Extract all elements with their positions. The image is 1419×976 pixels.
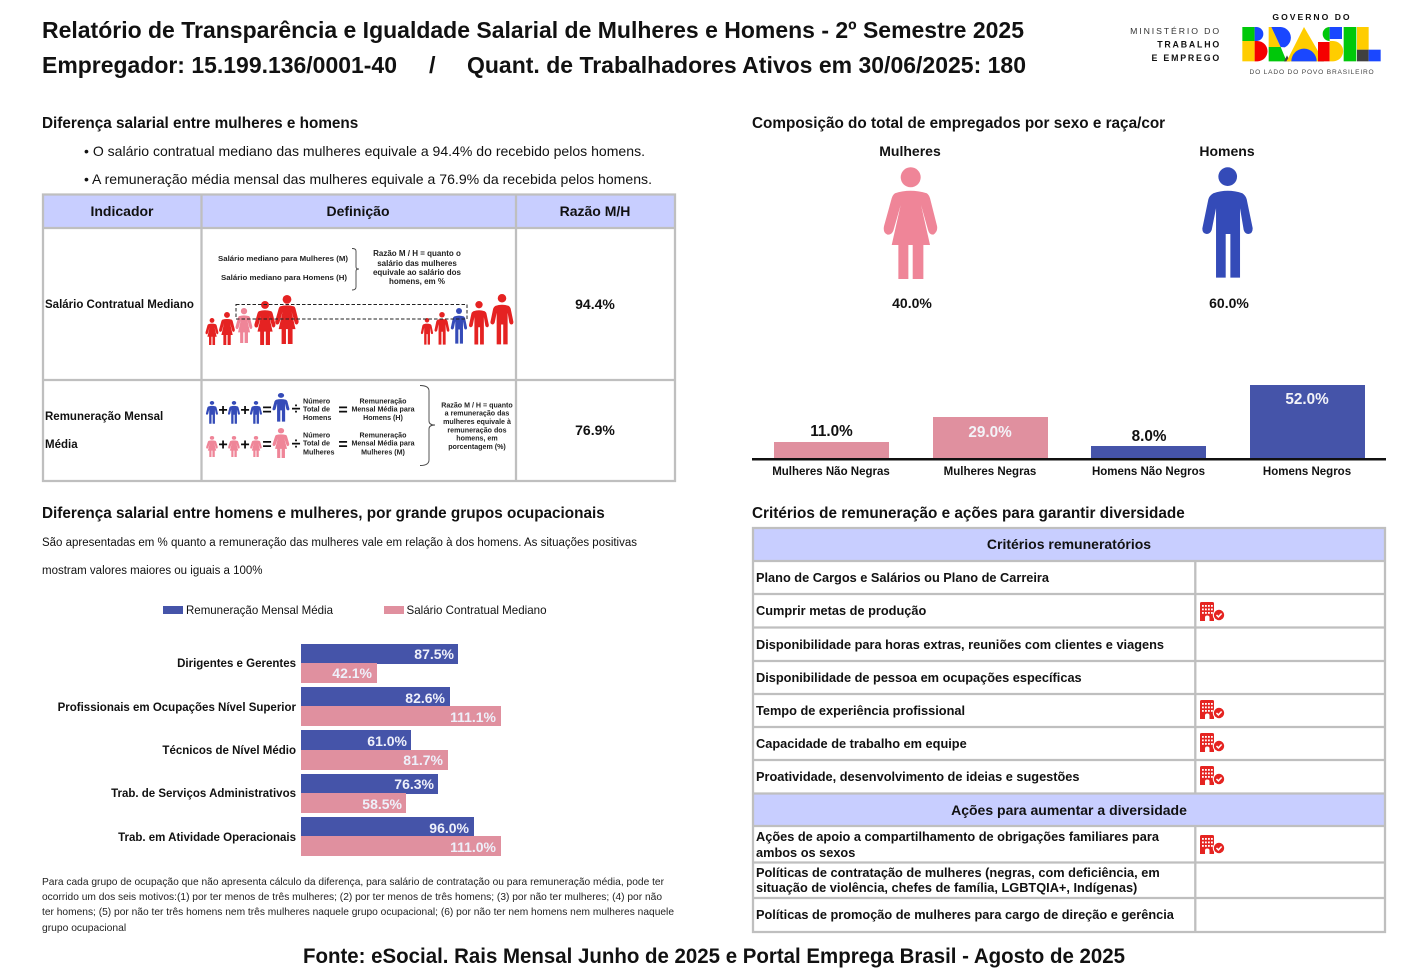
diagram: remuneração média: Homens (H) (363, 414, 404, 422)
legend: Remuneração Mensal Média (186, 603, 333, 617)
bars: trab. de serviços administrativos: 58.5% (362, 796, 403, 812)
diagram: remuneração média: Razão M / H = quanto (441, 402, 513, 410)
row: políticas de contratação: situação de violência, chefes de família, LGBTQIA+, Indígenas) (756, 880, 1137, 895)
logo: governo do brasil: GOVERNO DO (1272, 12, 1352, 22)
bars: técnicos de nível médio (162, 730, 448, 770)
column: mulheres negras (933, 417, 1048, 478)
text block: nota de rodapé: Para cada grupo de ocupação que não apresenta cálculo da diferença, para salário de contratação ou para remuneração média, pode ter (42, 877, 665, 888)
title (42, 17, 1026, 78)
bars: trab. de serviços administrativos: 76.3% (394, 776, 435, 792)
diagram: remuneração média: homens, em (456, 434, 498, 442)
row: remuneração mensal média: Média (45, 439, 78, 451)
panel: composição por sexo e raça/cor (752, 115, 1386, 478)
row: remuneração mensal média: 76.9% (575, 422, 615, 438)
diagram: remuneração média: + (218, 436, 228, 454)
diagram: remuneração média: Número (303, 430, 331, 440)
title: / (429, 52, 436, 78)
column: homens não negros: Homens Não Negros (1092, 466, 1205, 478)
bars: técnicos de nível médio: Técnicos de Nível Médio (162, 745, 296, 757)
row: proatividade: Proatividade, desenvolvimento de ideias e sugestões (756, 769, 1080, 784)
row: ações de apoio: ambos os sexos (756, 845, 855, 860)
text block: explicação: mostram valores maiores ou iguais a 100% (42, 565, 263, 577)
row: políticas de contratação (756, 865, 1160, 895)
pictogram: homens 60% (1199, 143, 1255, 311)
row: políticas de contratação: Políticas de contratação de mulheres (negras, com deficiência, em (756, 865, 1160, 880)
text block: explicação: São apresentadas em % quanto a remuneração das mulheres vale em relação à dos homens. As situações positivas (42, 537, 637, 549)
table header: Definição (326, 203, 390, 219)
column: mulheres não negras: 11.0% (810, 423, 853, 440)
header: critérios remuneratórios: Critérios remuneratórios (987, 536, 1151, 552)
row: capacidade de trabalho (756, 733, 1225, 752)
diagram: remuneração média: = (338, 436, 348, 454)
bars: técnicos de nível médio: 61.0% (367, 733, 408, 749)
diagram: remuneração média: a remuneração das (445, 410, 509, 418)
diagram: remuneração média: remuneração dos (447, 426, 507, 434)
diagram: salário mediano: salário das mulheres (377, 259, 457, 268)
diagram: remuneração média: ÷ (292, 401, 301, 418)
row: remuneração mensal média (45, 411, 615, 451)
diagram: remuneração média (206, 386, 513, 466)
bars: trab. de serviços administrativos (111, 774, 438, 813)
logo: ministério do trabalho e emprego: MINISTÉRIO DO (1130, 26, 1221, 36)
diagram: remuneração média: + (240, 436, 250, 454)
bars: trab. em atividade operacionais (118, 817, 501, 856)
diagram: salário mediano (205, 248, 513, 345)
bars: profissionais em ocupações nível superior: 111.1% (450, 709, 497, 725)
title: Empregador: 15.199.136/0001-40 (42, 52, 397, 78)
diagram: remuneração média: Remuneração (360, 432, 407, 440)
diagram: salário mediano: Salário mediano para Mulheres (M) (218, 254, 349, 263)
pictogram: homens 60%: 60.0% (1209, 295, 1249, 311)
diagram: salário mediano: homens, em % (389, 277, 445, 286)
diagram: remuneração média: mulheres equivale à (443, 418, 511, 426)
table header: Indicador (90, 203, 154, 219)
heading: critérios: Critérios de remuneração e ações para garantir diversidade (752, 505, 1185, 522)
diagram: remuneração média: Remuneração (360, 398, 407, 406)
row: remuneração mensal média: Remuneração Mensal (45, 411, 163, 423)
bars: dirigentes e gerentes: 42.1% (332, 665, 373, 681)
bars: dirigentes e gerentes: 87.5% (414, 646, 455, 662)
bars: técnicos de nível médio: 81.7% (403, 752, 444, 768)
row: plano de cargos: Plano de Cargos e Salários ou Plano de Carreira (756, 570, 1050, 585)
table header (90, 203, 630, 219)
diagram: remuneração média: Mensal Média para (351, 406, 415, 414)
pictogram: mulheres 40% (879, 143, 941, 311)
legend: Salário Contratual Mediano (406, 603, 547, 617)
column: mulheres não negras (772, 423, 890, 478)
panel: diferença salarial por grandes grupos ocupacionais (42, 505, 674, 934)
row: tempo de experiência: Tempo de experiência profissional (756, 703, 965, 718)
pictogram: mulheres 40%: Mulheres (879, 143, 941, 159)
row: proatividade (756, 766, 1225, 785)
bars: trab. em atividade operacionais: 96.0% (429, 820, 470, 836)
bars: trab. em atividade operacionais: Trab. em Atividade Operacionais (118, 832, 296, 844)
bars: profissionais em ocupações nível superior (58, 687, 501, 726)
logo: ministério do trabalho e emprego: TRABALHO (1157, 40, 1221, 50)
legend (163, 603, 547, 617)
row: disponibilidade de pessoa: Disponibilidade de pessoa em ocupações específicas (756, 670, 1082, 685)
column: homens negros: Homens Negros (1263, 466, 1351, 478)
diagram: salário mediano: Razão M / H = quanto o (373, 249, 461, 258)
table: critérios e ações (753, 528, 1385, 932)
heading: grupos ocupacionais: Diferença salarial entre homens e mulheres, por grande grupos ocupacionais (42, 505, 605, 522)
row: tempo de experiência (756, 700, 1225, 719)
row: salário contratual mediano (45, 296, 615, 312)
row: políticas de promoção: Políticas de promoção de mulheres para cargo de direção e gerência (756, 907, 1175, 922)
column chart: raça/cor (752, 385, 1386, 478)
column: homens não negros: 8.0% (1132, 428, 1167, 445)
pictogram: mulheres 40%: 40.0% (892, 295, 932, 311)
column: mulheres negras: Mulheres Negras (944, 466, 1036, 478)
diagram: remuneração média: Mensal Média para (351, 440, 415, 448)
panel: critérios de remuneração e ações (752, 505, 1385, 932)
diagram: remuneração média: = (262, 402, 272, 419)
text block: nota de rodapé: ocorrido um dos seis motivos:(1) por ter menos de três mulheres; (2) por ter menos de três homens; (3) por não ter mulheres; (4) por não (42, 892, 662, 903)
bars: profissionais em ocupações nível superior: 82.6% (405, 690, 446, 706)
row: salário contratual mediano: 94.4% (575, 296, 615, 312)
text block: bullet points (84, 143, 652, 187)
diagram: remuneração média: ÷ (292, 436, 301, 453)
bars: trab. em atividade operacionais: 111.0% (450, 839, 497, 855)
row: cumprir metas: Cumprir metas de produção (756, 603, 926, 618)
diagram: remuneração média: porcentagem (%) (448, 443, 506, 451)
diagram: remuneração média: + (218, 402, 228, 419)
text block: nota de rodapé: ter homens; (5) por não ter três homens nem três mulheres naquele grupo ocupacional; (6) por não ter nem homens nem mulheres naquele (42, 907, 674, 918)
header: ações para aumentar a diversidade: Ações para aumentar a diversidade (951, 802, 1187, 818)
text block: bullet points: • O salário contratual mediano das mulheres equivale a 94.4% do recebido pelos homens. (84, 143, 645, 159)
logo: governo do brasil (1242, 12, 1381, 76)
diagram: remuneração média: Total de (303, 404, 330, 414)
diagram: salário mediano: equivale ao salário dos (373, 268, 462, 277)
footer: fonte: Fonte: eSocial. Rais Mensal Junho de 2025 e Portal Emprega Brasil - Agosto de 2025 (303, 944, 1125, 968)
heading: diferença salarial: Diferença salarial entre mulheres e homens (42, 115, 358, 132)
text block: bullet points: • A remuneração média mensal das mulheres equivale a 76.9% da recebida pelos homens. (84, 171, 652, 187)
text block: explicação (42, 537, 637, 577)
bars: profissionais em ocupações nível superior: Profissionais em Ocupações Nível Superior (58, 702, 297, 714)
column: homens negros: 52.0% (1285, 391, 1329, 408)
text block: nota de rodapé: grupo ocupacional (42, 923, 126, 934)
logo: governo do brasil: DO LADO DO POVO BRASILEIRO (1249, 69, 1375, 76)
row: disponibilidade para horas extras: Disponibilidade para horas extras, reuniões com clientes e viagens (756, 637, 1164, 652)
title: Quant. de Trabalhadores Ativos em 30/06/2025: 180 (467, 52, 1026, 78)
diagram: remuneração média: Total de (303, 438, 330, 448)
bars: dirigentes e gerentes: Dirigentes e Gerentes (177, 658, 296, 670)
row: salário contratual mediano: Salário Contratual Mediano (45, 299, 194, 311)
column: homens negros (1250, 385, 1365, 478)
row: ações de apoio: Ações de apoio a compartilhamento de obrigações familiares para (756, 829, 1160, 844)
heading: composição: Composição do total de empregados por sexo e raça/cor (752, 115, 1165, 132)
table header: Razão M/H (560, 203, 630, 219)
text block: nota de rodapé (42, 877, 674, 934)
diagram: remuneração média: = (338, 402, 348, 419)
column: homens não negros (1091, 428, 1206, 478)
bars: trab. de serviços administrativos: Trab. de Serviços Administrativos (111, 788, 296, 800)
diagram: remuneração média: = (262, 436, 272, 454)
logo: ministério do trabalho e emprego (1130, 26, 1221, 63)
column: mulheres negras: 29.0% (968, 424, 1012, 441)
row: ações de apoio (756, 829, 1225, 860)
diagram: remuneração média: Mulheres (M) (361, 448, 406, 456)
row: cumprir metas (756, 602, 1225, 621)
table: indicador, definição, razão (43, 194, 675, 481)
diagram: remuneração média: Homens (303, 413, 331, 422)
diagram: remuneração média: + (240, 402, 250, 419)
diagram: remuneração média: Número (303, 396, 331, 406)
bars: dirigentes e gerentes (177, 644, 458, 683)
column: mulheres não negras: Mulheres Não Negras (772, 466, 890, 478)
bar chart: grupos ocupacionais (58, 644, 501, 856)
panel: diferença salarial entre mulheres e homens (42, 115, 675, 481)
diagram: remuneração média: Mulheres (303, 448, 335, 456)
pictogram: homens 60%: Homens (1199, 143, 1255, 159)
row: capacidade de trabalho: Capacidade de trabalho em equipe (756, 736, 967, 751)
logo: ministério do trabalho e emprego: E EMPREGO (1152, 53, 1221, 63)
title: Relatório de Transparência e Igualdade Salarial de Mulheres e Homens - 2º Semestre 2025 (42, 17, 1024, 43)
diagram: salário mediano: Salário mediano para Homens (H) (221, 273, 348, 282)
